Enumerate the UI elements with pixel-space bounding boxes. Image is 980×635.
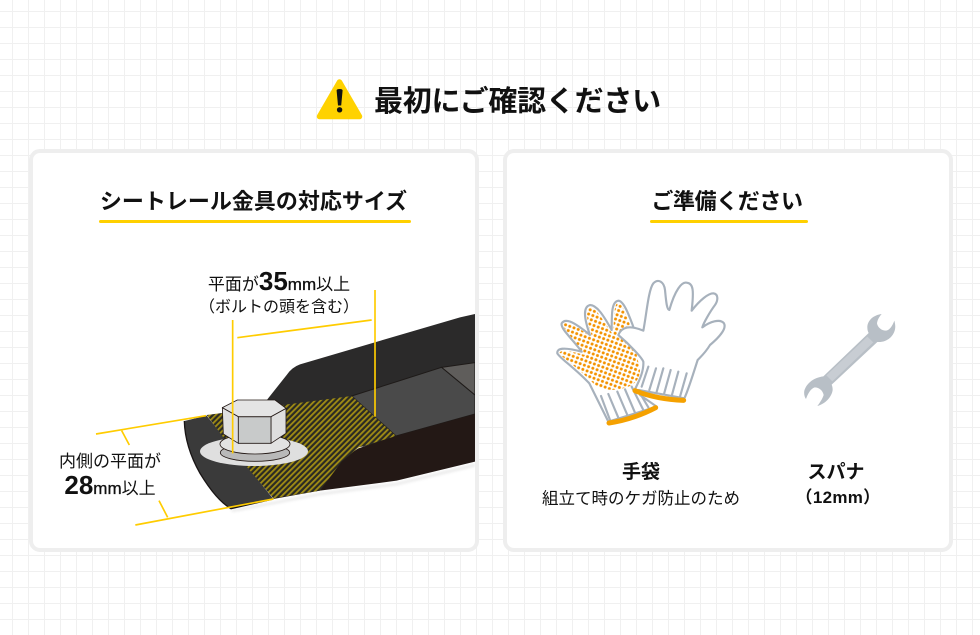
label: wrench: スパナ <box>807 457 864 484</box>
icon: wrench <box>804 314 896 406</box>
left glove orange dots <box>559 302 640 390</box>
label: gloves: 手袋 <box>622 457 660 484</box>
text: gloves purpose: 組立て時のケガ防止のため <box>542 485 740 509</box>
left glove <box>557 301 657 422</box>
label: 35mm flat: （ボルトの頭を含む） <box>199 299 359 316</box>
title: 最初にご確認ください <box>374 78 661 120</box>
label: 28mm inner flat <box>59 452 161 500</box>
blade tip <box>184 416 273 509</box>
right glove cuff <box>635 391 684 400</box>
label: 35mm flat: 平面が35mm以上 <box>208 266 350 296</box>
upper arm <box>267 314 475 447</box>
inner far gray <box>442 363 475 395</box>
wrench handle highlight <box>826 337 873 381</box>
inner flat gray <box>352 367 475 436</box>
panel: seat rail bracket size <box>29 149 479 552</box>
text: wrench size: （12mm） <box>796 488 880 507</box>
yellow measure lines: front <box>96 320 273 525</box>
heading: bracket size: シートレール金具の対応サイズ <box>100 184 407 216</box>
label: 28mm inner flat: 内側の平面が <box>59 452 161 471</box>
illustration: seat rail bracket with bolt <box>96 290 475 526</box>
label: 28mm inner flat: 28mm以上 <box>64 470 156 500</box>
bolt <box>200 400 308 466</box>
label: 35mm flat <box>199 266 359 316</box>
icon: warning triangle <box>316 79 362 120</box>
heading: prepare: ご準備ください <box>651 184 803 216</box>
panel: please prepare <box>503 149 953 552</box>
heading underline <box>99 220 411 223</box>
hatched flat area <box>207 396 396 498</box>
right glove <box>618 281 725 398</box>
left glove cuff <box>609 408 656 423</box>
wrench body <box>804 314 895 406</box>
icon: gloves <box>556 280 726 426</box>
lower body <box>273 414 475 499</box>
heading underline <box>650 220 808 223</box>
blade shadow <box>230 463 475 512</box>
yellow measure lines: rear <box>237 290 375 417</box>
